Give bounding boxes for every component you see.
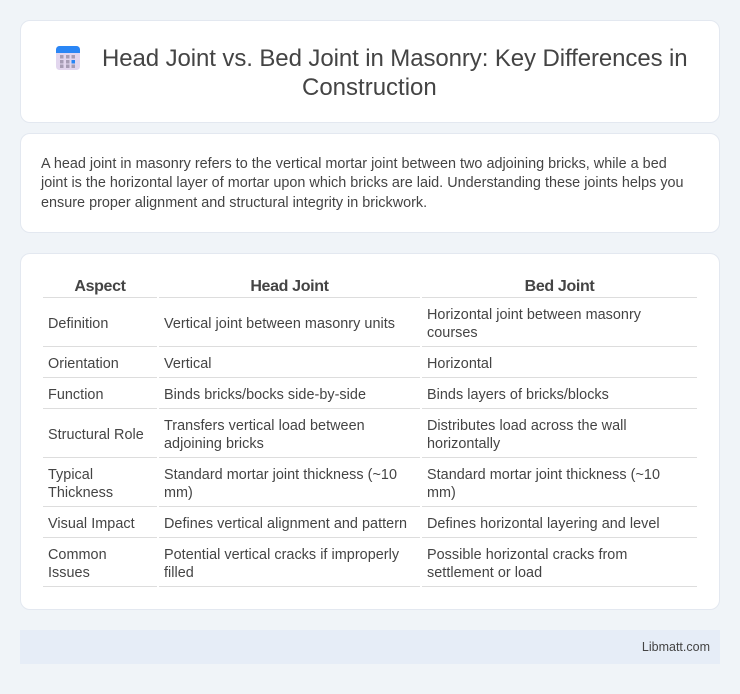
table header [74, 278, 594, 295]
title: Head Joint vs. Bed Joint in Masonry: Key Differences in [102, 45, 688, 72]
table rows: horizontally [427, 436, 500, 452]
table rows: Vertical joint between masonry units [164, 316, 395, 332]
table rows: Visual Impact [48, 516, 135, 532]
table rows: Structural Role [48, 427, 144, 443]
table rows: Horizontal [427, 356, 492, 372]
table rows: adjoining bricks [164, 436, 264, 452]
footer credit: Libmatt.com [642, 640, 710, 654]
table rows: Vertical [164, 356, 212, 372]
table rows [43, 297, 697, 587]
table rows: Binds layers of bricks/blocks [427, 387, 609, 403]
table rows: Common [48, 547, 107, 563]
table rows: courses [427, 325, 478, 341]
table rows: mm) [164, 485, 193, 501]
table rows: Possible horizontal cracks from [427, 547, 627, 563]
table header: Head Joint [250, 278, 329, 295]
table rows: mm) [427, 485, 456, 501]
table rows: Distributes load across the wall [427, 418, 627, 434]
table rows: Horizontal joint between masonry [427, 307, 641, 323]
table header: Aspect [74, 278, 126, 295]
table rows: Issues [48, 565, 90, 581]
panel: title card [20, 20, 720, 123]
table header: Bed Joint [525, 278, 594, 295]
table rows: Orientation [48, 356, 119, 372]
table rows: Defines horizontal layering and level [427, 516, 660, 532]
table rows: Transfers vertical load between [164, 418, 365, 434]
table rows: Function [48, 387, 104, 403]
panel: comparison table [20, 253, 720, 610]
title: Construction [302, 74, 437, 101]
table rows: Thickness [48, 485, 113, 501]
panel: intro text: A head joint in masonry refers to the vertical mortar joint between two adjoining bricks, while a bed [41, 156, 667, 172]
table rows: Standard mortar joint thickness (~10 [164, 467, 397, 483]
panel: intro text [20, 133, 720, 233]
table rows: Definition [48, 316, 108, 332]
table rows: settlement or load [427, 565, 542, 581]
panel: intro text: joint is the horizontal layer of mortar upon which bricks are laid. Understanding these joints helps you [41, 175, 684, 191]
table rows: Typical [48, 467, 93, 483]
table rows: Defines vertical alignment and pattern [164, 516, 407, 532]
table rows: filled [164, 565, 194, 581]
footer [20, 630, 720, 664]
table rows: Binds bricks/bocks side-by-side [164, 387, 366, 403]
table rows: Potential vertical cracks if improperly [164, 547, 399, 563]
title [102, 45, 688, 101]
panel: intro text: ensure proper alignment and structural integrity in brickwork. [41, 195, 427, 211]
table rows: Standard mortar joint thickness (~10 [427, 467, 660, 483]
icon: calendar [56, 46, 80, 70]
